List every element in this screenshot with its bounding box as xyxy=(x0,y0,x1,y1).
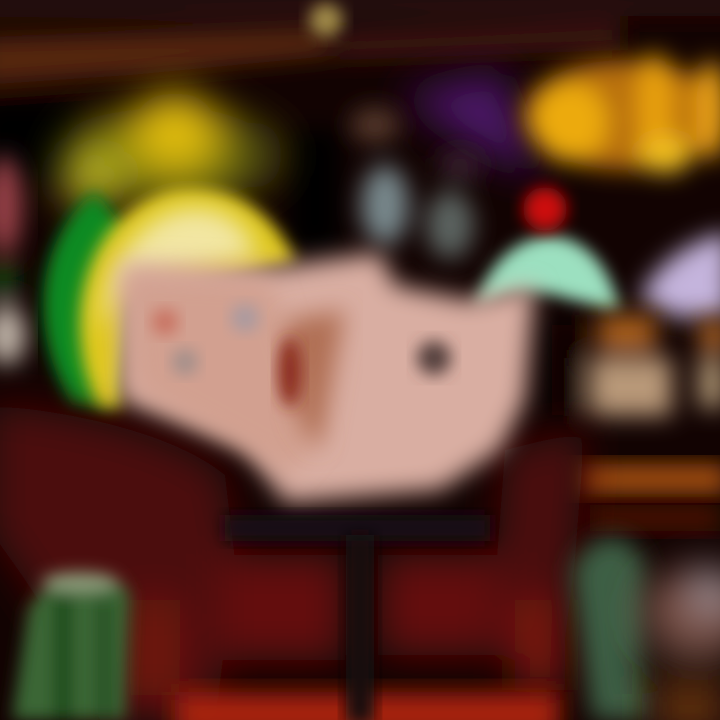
card suit: dark red xyxy=(278,337,302,407)
background figures xyxy=(350,107,482,259)
red light xyxy=(523,187,567,231)
card suit: dark pip xyxy=(417,341,451,375)
left edge red and white lights xyxy=(0,155,26,365)
lower right dark red xyxy=(590,505,720,531)
cards body xyxy=(120,252,535,503)
lavender lamp xyxy=(640,232,720,318)
table leg xyxy=(346,535,374,720)
wheel green rim xyxy=(43,192,135,410)
orange counter band xyxy=(578,464,720,494)
playing cards hand xyxy=(120,252,535,503)
card suit: small red pip xyxy=(152,309,178,335)
card shading xyxy=(125,275,320,475)
card suit: gray pip xyxy=(172,349,198,375)
chandelier: orange-yellow lamp xyxy=(523,53,720,173)
slot machines xyxy=(552,315,720,416)
wheel crown xyxy=(60,92,283,208)
right side table xyxy=(640,568,720,720)
right green cactus xyxy=(572,538,648,720)
red armchair seats xyxy=(0,405,585,720)
purple drape xyxy=(400,72,540,175)
mint dome lamp xyxy=(475,236,620,312)
red floor seat xyxy=(175,692,560,720)
table top xyxy=(225,515,490,541)
card suit: upper gray pip xyxy=(231,304,259,332)
ceiling light xyxy=(309,3,343,37)
card fold: orange red xyxy=(285,310,345,450)
left green cactus xyxy=(12,572,130,720)
wheel pale arc xyxy=(100,208,258,330)
wheel yellow body xyxy=(80,188,296,410)
ceiling beams xyxy=(0,0,720,250)
yellow wheel xyxy=(43,92,296,410)
